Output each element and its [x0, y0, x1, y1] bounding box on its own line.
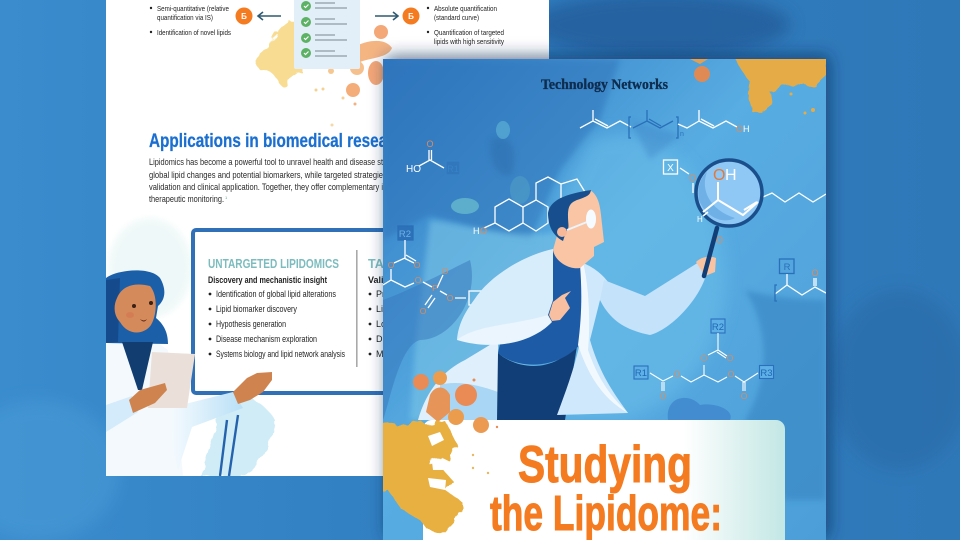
glasses — [567, 220, 592, 230]
targeted lipidomics column: M — [376, 349, 384, 359]
title card — [423, 420, 785, 540]
left arrow and badge — [236, 8, 281, 24]
molecule: lipid chain with X — [664, 160, 826, 245]
right bullet list — [427, 4, 504, 46]
molecule: triglyceride: O — [674, 369, 681, 379]
coat tail left — [418, 340, 498, 420]
shirt — [498, 250, 590, 365]
body paragraph: therapeutic monitoring. — [149, 194, 224, 204]
untargeted lipidomics column: Identification of global lipid alterations — [216, 289, 336, 299]
molecule: triglyceride: O — [701, 353, 708, 363]
molecule: carboxylic acid: R1 — [447, 164, 459, 174]
left bullet list: Semi-quantitative (relative — [157, 4, 229, 13]
magnifying glass: H — [725, 167, 737, 184]
right arrow and badge: Б — [408, 12, 414, 21]
magnifying glass — [696, 160, 762, 276]
molecule: isoprenoid chain: O — [736, 124, 743, 134]
presenter illustration — [106, 270, 272, 476]
right arm sleeve — [600, 262, 707, 335]
targeted lipidomics column: Di — [376, 334, 384, 344]
molecule: triglyceride — [634, 319, 774, 401]
hair — [106, 270, 168, 344]
title: Studying — [518, 436, 692, 494]
title: the Lipidome: — [490, 487, 722, 540]
molecule: lipid chain with X: O — [716, 235, 723, 245]
pointing hand — [549, 291, 571, 321]
clipboard with checklist — [294, 0, 360, 69]
molecule: triglyceride: O — [741, 391, 748, 401]
yellow splash bottom left — [380, 420, 489, 534]
coat torso left — [457, 249, 553, 340]
molecule: triglyceride: O — [660, 391, 667, 401]
front cover — [383, 59, 826, 540]
yellow and orange splash — [256, 18, 392, 126]
molecule: phospholipid — [383, 226, 483, 316]
watercolor texture — [383, 59, 826, 500]
targeted lipidomics column: Pr — [376, 289, 385, 299]
targeted lipidomics column: Vali — [368, 275, 384, 285]
untargeted lipidomics column: Discovery and mechanistic insight — [208, 275, 327, 285]
molecule: phospholipid: R2 — [399, 229, 411, 240]
untargeted lipidomics column: Systems biology and lipid network analysis — [216, 349, 345, 359]
untargeted lipidomics column: Hypothesis generation — [216, 319, 286, 329]
body paragraph: Lipidomics has become a powerful tool to unravel health and disease st — [149, 157, 383, 167]
targeted lipidomics column — [368, 259, 383, 357]
molecule: phospholipid: P — [432, 283, 438, 293]
left bullet list: Identification of novel lipids — [157, 28, 231, 37]
molecule: phospholipid: O — [420, 306, 427, 316]
back page: lipidomics document — [106, 0, 549, 476]
hand on tablet — [129, 383, 167, 413]
orange splash above card — [413, 371, 498, 433]
untargeted lipidomics column: UNTARGETED LIPIDOMICS — [208, 257, 339, 271]
section heading: Applications in biomedical research — [149, 131, 411, 152]
molecule: lipid chain with X: H — [697, 215, 703, 224]
body paragraph: global lipid changes and potential biomarkers, while targeted strategie — [149, 170, 383, 180]
tablet — [148, 352, 195, 408]
body paragraph: validation and clinical application. Together, they offer complementary i — [149, 182, 383, 192]
molecule: R group: O — [811, 268, 819, 278]
right arrow and badge — [375, 8, 420, 24]
untargeted lipidomics column: Lipid biomarker discovery — [216, 304, 297, 314]
molecule: R group: R — [784, 262, 791, 273]
face — [115, 284, 156, 333]
molecule: steroid: H — [473, 226, 480, 236]
molecule: carboxylic acid: O — [426, 139, 434, 149]
molecule: phospholipid: O — [388, 260, 395, 270]
molecule: lipid chain with X: O — [689, 173, 696, 183]
molecule: R group — [775, 259, 826, 301]
right bullet list: lipids with high sensitivity — [434, 37, 504, 46]
coat torso right — [557, 264, 628, 415]
left bullet list — [150, 4, 231, 37]
molecule: lipid chain with X: X — [667, 163, 674, 174]
coat stripes — [220, 415, 238, 476]
coat — [106, 341, 183, 476]
molecule: phospholipid: O — [414, 260, 421, 270]
untargeted lipidomics column — [208, 257, 345, 359]
molecule: triglyceride: R3 — [760, 368, 773, 379]
molecule: phospholipid: O — [415, 275, 422, 285]
right bullet list: (standard curve) — [434, 13, 479, 22]
shirt — [122, 342, 153, 390]
molecule: triglyceride: R2 — [712, 322, 724, 333]
right bullet list: Absolute quantification — [434, 4, 497, 13]
molecule: carboxylic acid: HO — [406, 164, 421, 175]
left arrow and badge: Б — [241, 12, 247, 21]
logo: Technology Networks: Technology Networks — [541, 77, 668, 93]
right bullet list: Quantification of targeted — [434, 28, 504, 37]
molecule: isoprenoid chain: H — [743, 124, 750, 134]
comparison box — [191, 228, 383, 395]
molecule: triglyceride: O — [727, 353, 734, 363]
molecule: phospholipid: O — [442, 266, 449, 276]
scientist illustration — [418, 190, 716, 420]
molecule: phospholipid: O — [447, 293, 454, 303]
molecule: steroid — [473, 177, 585, 236]
open hand — [233, 372, 272, 404]
title — [490, 436, 722, 540]
body paragraph: 1 — [225, 195, 228, 200]
right hand on handle — [696, 257, 716, 276]
pale teal splash behind presenter — [108, 218, 275, 476]
yellow and orange splash: top right — [690, 55, 830, 114]
trousers — [497, 348, 577, 420]
magnifying glass: O — [713, 167, 725, 184]
targeted lipidomics column: Li — [376, 304, 383, 314]
hair — [548, 190, 591, 241]
molecule: isoprenoid chain: n — [680, 131, 684, 138]
targeted lipidomics column: TA — [368, 257, 384, 271]
body paragraph — [149, 157, 383, 204]
targeted lipidomics column: Lo — [376, 319, 386, 329]
neck and head — [553, 190, 604, 268]
molecule: isoprenoid chain — [580, 110, 750, 138]
molecule: carboxylic acid — [406, 139, 460, 175]
molecule: triglyceride: O — [728, 369, 735, 379]
untargeted lipidomics column: Disease mechanism exploration — [216, 334, 317, 344]
molecule: steroid: O — [480, 226, 487, 236]
left bullet list: quantification via IS) — [157, 13, 213, 22]
molecule: triglyceride: R1 — [635, 368, 647, 379]
